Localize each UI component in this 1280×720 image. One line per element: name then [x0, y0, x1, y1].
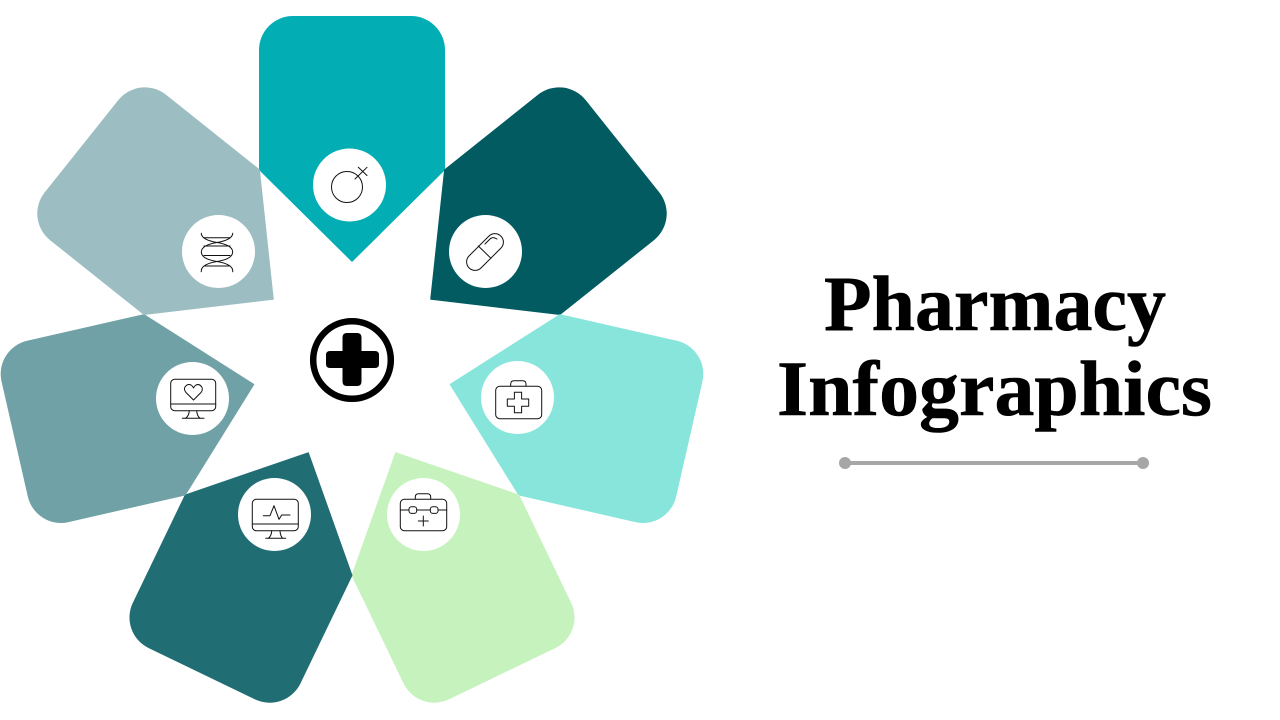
icon: capsule pill in white circle: [449, 215, 522, 288]
petal: teal top: [259, 16, 445, 262]
title: [777, 260, 1212, 432]
icon: toolbox in white circle: [387, 478, 460, 551]
icon: central medical cross: [313, 321, 391, 399]
icon: first-aid briefcase in white circle: [481, 361, 554, 434]
title: Pharmacy: [824, 260, 1166, 347]
icon: heart monitor in white circle: [156, 362, 229, 435]
icon: DNA helix in white circle: [182, 215, 255, 288]
icon: gender symbol in white circle: [313, 148, 386, 222]
petal: light green lower right: [312, 412, 586, 714]
petal: muted teal left: [0, 294, 275, 530]
icon: heartbeat monitor in white circle: [238, 478, 311, 551]
petal: aqua right: [429, 294, 710, 530]
petal: dark teal upper right: [372, 74, 681, 372]
title underline with end dots: [839, 457, 1149, 469]
petal: deep teal lower left: [118, 412, 392, 714]
title: Infographics: [777, 345, 1212, 432]
petal: pale blue-grey upper left: [23, 74, 332, 372]
